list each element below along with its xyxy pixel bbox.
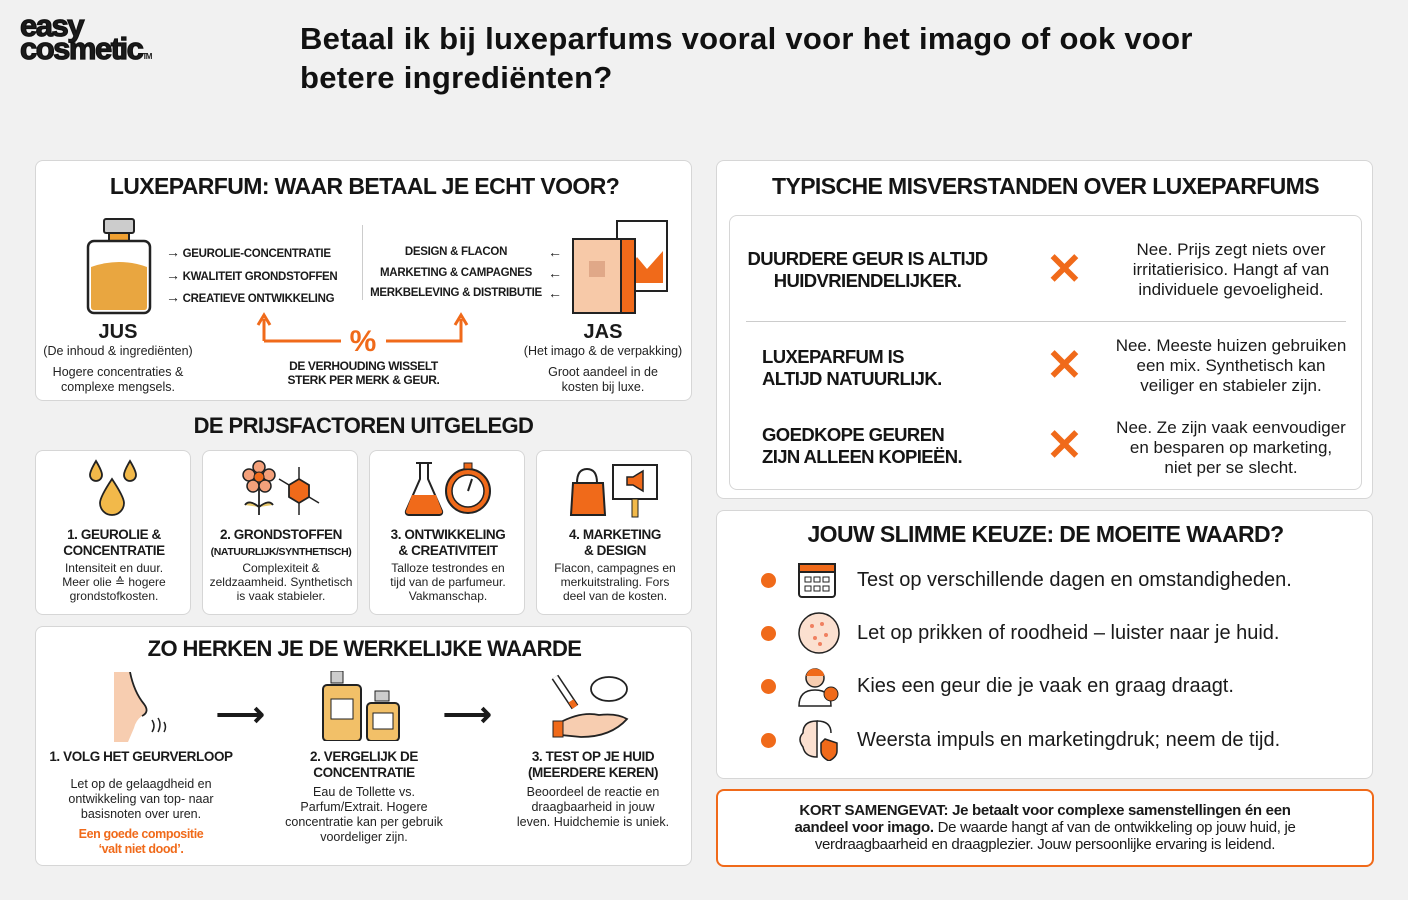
step 2: CONCENTRATIE [313, 765, 415, 780]
myth 3: ✕ [1046, 421, 1083, 470]
step 3: Beoordeel de reactie en [527, 785, 659, 799]
card: grondstoffen [202, 450, 358, 615]
panel: luxeparfum: ← [548, 264, 562, 280]
step 1: ontwikkeling van top- naar [68, 792, 214, 806]
myth 2: veiliger en stabieler zijn. [1140, 376, 1322, 395]
step 1: 1. VOLG HET GEURVERLOOP [49, 749, 233, 764]
jus list: → GEUROLIE-CONCENTRATIE [166, 244, 331, 260]
step 3 [517, 749, 669, 829]
step 3: 3. TEST OP JE HUID [532, 749, 654, 764]
step 1: basisnoten over uren. [81, 807, 201, 821]
step 2: concentratie kan per gebruik [285, 815, 443, 829]
card: grondstoffen: 2. GRONDSTOFFEN [220, 527, 342, 542]
myth 2: een mix. Synthetisch kan [1136, 356, 1325, 375]
card: ontwikkeling [369, 450, 525, 615]
jus list: → KWALITEIT GRONDSTOFFEN [166, 266, 337, 282]
jus label: complexe mengsels. [61, 380, 175, 394]
title: betere ingrediënten? [300, 60, 613, 95]
myth 2: ✕ [1046, 341, 1083, 390]
card: grondstoffen: zeldzaamheid. Synthetisch [210, 575, 352, 589]
panel: luxeparfum [35, 160, 692, 401]
step 1: Let op de gelaagdheid en [70, 777, 212, 791]
jas list: DESIGN & FLACON [405, 246, 507, 258]
icon: nose [114, 672, 166, 742]
jus label [43, 321, 193, 394]
card: marketing: & DESIGN [584, 543, 646, 558]
panel: slimme keuze [716, 510, 1373, 779]
arrow: ⟶ [216, 696, 265, 734]
step 1 [49, 749, 233, 856]
icon: drops [89, 459, 137, 516]
callout: kort samengevat: verdraagbaarheid en draagplezier. Jouw persoonlijke ervaring is leidend. [815, 836, 1275, 853]
callout: kort samengevat: KORT SAMENGEVAT: Je betaalt voor complexe samenstellingen én een [799, 802, 1291, 819]
card: grondstoffen: is vaak stabieler. [237, 589, 325, 603]
ratio note: STERK PER MERK & GEUR. [288, 373, 439, 387]
tip 3 [761, 668, 1234, 707]
card: ontwikkeling: & CREATIVITEIT [398, 543, 498, 558]
myth 2: ALTIJD NATUURLIJK. [762, 368, 942, 389]
myth 1: irritatierisico. Hangt af van [1133, 260, 1329, 279]
arrow: percent: % [350, 325, 376, 358]
myth 1: ✕ [1046, 245, 1083, 294]
card: geurolie: 1. GEUROLIE & [67, 527, 161, 542]
panel: misverstanden [716, 160, 1373, 499]
myth 3: ZIJN ALLEEN KOPIEËN. [762, 446, 962, 467]
jus list: → CREATIEVE ONTWIKKELING [166, 289, 334, 305]
logo: easy [20, 8, 83, 43]
jas label: (Het imago & de verpakking) [524, 344, 682, 358]
myth 2 [762, 336, 1346, 395]
jas list: MARKETING & CAMPAGNES [380, 266, 532, 278]
myth 1: Nee. Prijs zegt niets over [1137, 240, 1325, 259]
tip 2 [761, 612, 1280, 654]
card: marketing: merkuitstraling. Fors [561, 575, 669, 589]
icon: perfume bottle [86, 218, 152, 314]
logo: cosmeticTM [20, 31, 151, 66]
heading: ZO HERKEN JE DE WERKELIJKE WAARDE [148, 636, 581, 661]
myth 1: individuele gevoeligheid. [1138, 280, 1324, 299]
card: marketing: Flacon, campagnes en [554, 561, 676, 575]
tip 1 [761, 563, 1292, 598]
card: geurolie [35, 450, 191, 615]
step 3: (MEERDERE KEREN) [528, 765, 658, 780]
icon: flower molecule [242, 460, 320, 515]
myth 3: Nee. Ze zijn vaak eenvoudiger [1116, 418, 1346, 437]
jas label: JAS [584, 321, 622, 343]
icon: flask and stopwatch [404, 462, 491, 516]
heading: LUXEPARFUM: WAAR BETAAL JE ECHT VOOR? [110, 173, 619, 199]
jas label: Groot aandeel in de [548, 365, 658, 379]
jas list: MERKBELEVING & DISTRIBUTIE [370, 287, 542, 299]
jus label: Hogere concentraties & [53, 365, 183, 379]
heading: JOUW SLIMME KEUZE: DE MOEITE WAARD? [807, 521, 1284, 547]
myth 3 [762, 418, 1346, 477]
icon: bag and billboard [570, 464, 658, 518]
myth 3: niet per se slecht. [1164, 458, 1298, 477]
panel: luxeparfum: ← [548, 285, 562, 301]
myth 3: en besparen op marketing, [1130, 438, 1332, 457]
arrow: percent [256, 312, 468, 358]
card: grondstoffen: (NATUURLIJK/SYNTHETISCH) [211, 546, 351, 558]
card: marketing: deel van de kosten. [563, 589, 667, 603]
myth 2: LUXEPARFUM IS [762, 346, 904, 367]
myth 1: HUIDVRIENDELIJKER. [774, 270, 961, 291]
tip 4: Weersta impuls en marketingdruk; neem de tijd. [857, 729, 1280, 751]
card: ontwikkeling: Vakmanschap. [409, 589, 487, 603]
step 2: Eau de Tollette vs. [313, 785, 415, 799]
myth 2: Nee. Meeste huizen gebruiken [1116, 336, 1346, 355]
heading: TYPISCHE MISVERSTANDEN OVER LUXEPARFUMS [772, 173, 1319, 199]
icon: packaging [572, 220, 668, 314]
myth 1: DUURDERE GEUR IS ALTIJD [747, 248, 988, 269]
tip 3: Kies een geur die je vaak en graag draagt. [857, 675, 1234, 697]
step 3: leven. Huidchemie is uniek. [517, 815, 669, 829]
step 3: draagbaarheid in jouw [531, 800, 654, 814]
step 2: 2. VERGELIJK DE [310, 749, 418, 764]
myth 3: GOEDKOPE GEUREN [762, 424, 944, 445]
step 1: Een goede compositie [79, 827, 203, 841]
title: Betaal ik bij luxeparfums vooral voor het imago of ook voor [300, 21, 1193, 56]
icon: two bottles [322, 671, 400, 741]
jus label: JUS [99, 321, 137, 343]
arrow: ⟶ [443, 696, 492, 734]
logo [20, 8, 152, 66]
inner box [729, 215, 1362, 490]
card: geurolie: Intensiteit en duur. [65, 561, 163, 575]
myth 1 [747, 240, 1329, 299]
jus label: (De inhoud & ingrediënten) [43, 344, 193, 358]
card: ontwikkeling: 3. ONTWIKKELING [391, 527, 505, 542]
ratio note: DE VERHOUDING WISSELT [289, 359, 438, 373]
card: grondstoffen: Complexiteit & [242, 561, 320, 575]
card: marketing: 4. MARKETING [569, 527, 661, 542]
card: ontwikkeling: tijd van de parfumeur. [390, 575, 506, 589]
ratio note [288, 359, 439, 387]
tip 1: Test op verschillende dagen en omstandigheden. [857, 569, 1292, 591]
panel: werkelijke waarde [35, 626, 692, 866]
jas label [524, 321, 682, 394]
step 2: voordeliger zijn. [320, 830, 408, 844]
jas list [370, 246, 542, 299]
callout: kort samengevat [716, 789, 1374, 867]
card: geurolie: grondstofkosten. [70, 589, 158, 603]
card: geurolie: CONCENTRATIE [63, 543, 165, 558]
jus list [166, 244, 337, 305]
icon: hand with strip [552, 674, 628, 738]
step 1: ‘valt niet dood’. [99, 842, 183, 856]
step 2 [285, 749, 443, 844]
card: ontwikkeling: Talloze testrondes en [391, 561, 505, 575]
heading: prijsfactoren: DE PRIJSFACTOREN UITGELEGD [194, 413, 533, 438]
panel: luxeparfum: ← [548, 244, 562, 260]
callout: kort samengevat: aandeel voor imago. De waarde hangt af van de ontwikkeling op jouw huid, je [794, 819, 1296, 836]
title [300, 21, 1193, 95]
tip 4 [761, 720, 1280, 761]
card: marketing [536, 450, 692, 615]
card: geurolie: Meer olie ≙ hogere [62, 575, 166, 589]
jas label: kosten bij luxe. [562, 380, 644, 394]
tip 2: Let op prikken of roodheid – luister naar je huid. [857, 622, 1280, 644]
step 2: Parfum/Extrait. Hogere [300, 800, 428, 814]
